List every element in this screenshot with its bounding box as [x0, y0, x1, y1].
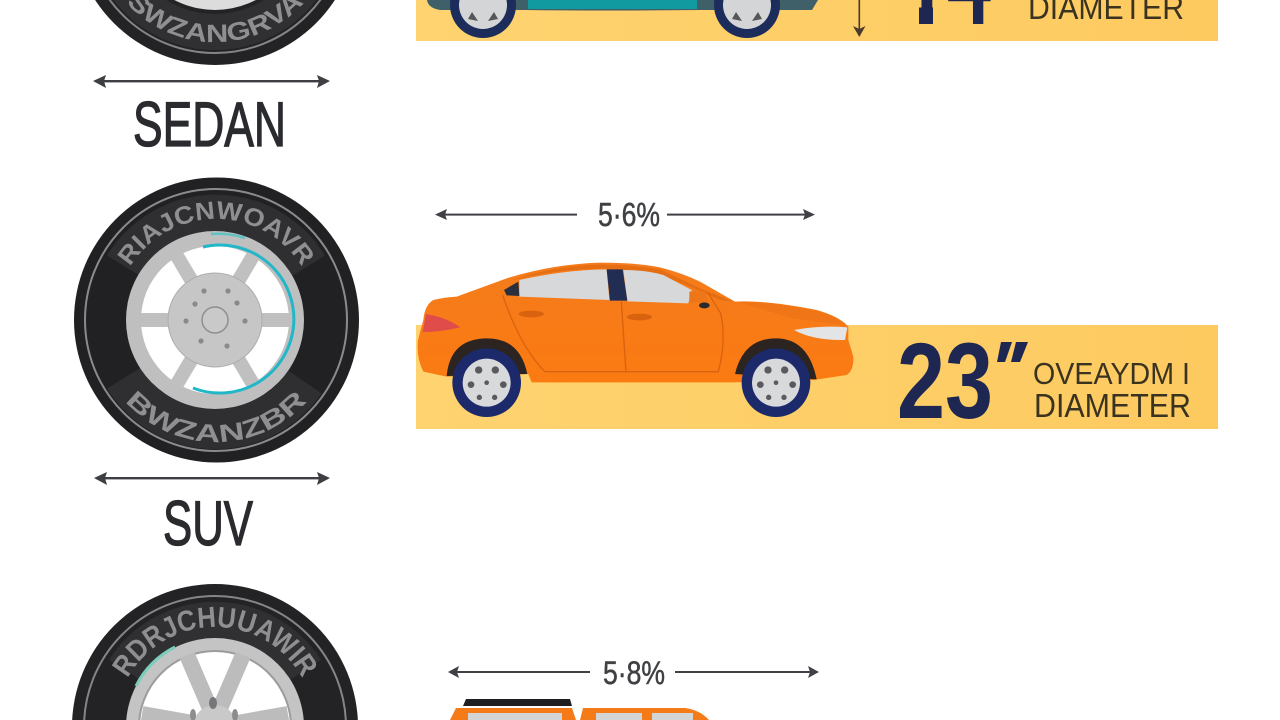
icon: suv tire: RIAJCNWOAVR	[117, 201, 313, 266]
heading: SEDAN: SEDAN	[133, 90, 286, 160]
size band: suv	[416, 325, 1218, 429]
illustration: teal car	[427, 0, 818, 38]
arrow: car width with percentage	[435, 196, 815, 233]
icon: suv tire	[74, 178, 359, 462]
arrow: car width with percentage: 5·6%	[598, 196, 660, 233]
illustration: orange car	[418, 263, 853, 417]
icon: third tire: RDRJCHUUAWIR	[112, 606, 316, 678]
label: overall diameter: DIAMETER	[1034, 387, 1191, 424]
icon: suv tire: BWZANZBR	[126, 390, 307, 442]
arrow: third car width with percentage: 5·8%	[603, 655, 665, 691]
panel: third row (bottom)	[72, 584, 819, 720]
arrow: suv tire width	[94, 472, 330, 485]
label: overall diameter	[1033, 356, 1191, 424]
arrow: third car width with percentage	[448, 655, 819, 691]
heading: SUV: SUV	[163, 489, 253, 559]
label: overall diameter: OVEAYDM I	[1033, 356, 1190, 391]
illustration: orange suv roof	[450, 699, 709, 720]
size band: sedan	[416, 0, 1218, 41]
arrow: sedan tire width	[93, 75, 330, 88]
value: 23 inches: 23	[897, 320, 993, 441]
panel: suv row (middle)	[74, 178, 1218, 559]
panel: sedan row (top)	[93, 0, 1218, 160]
icon: inch mark	[997, 342, 1028, 362]
icon: third tire	[72, 584, 358, 720]
icon: sedan tire	[95, 0, 335, 65]
arrow: sedan height	[853, 0, 866, 37]
